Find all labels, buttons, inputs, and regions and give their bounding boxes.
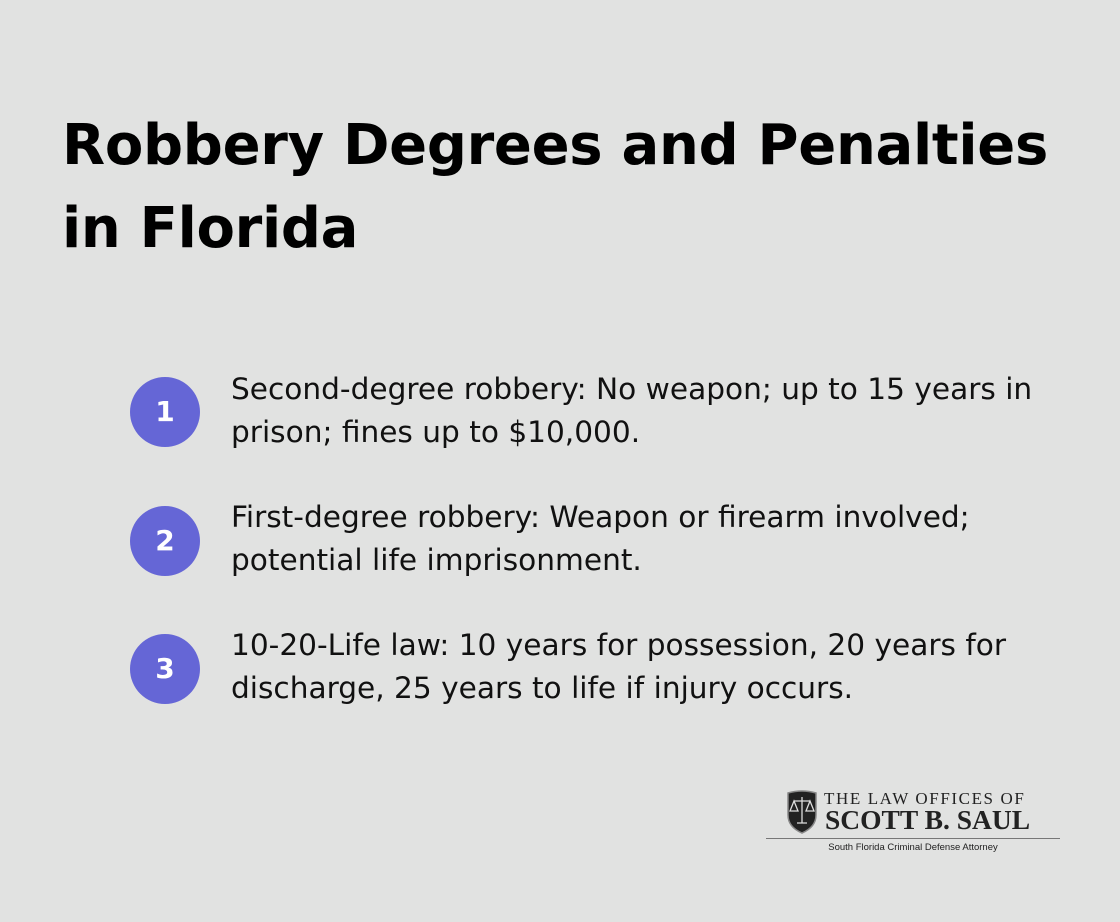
circle 3 xyxy=(130,634,200,704)
circle 2: 2 xyxy=(155,524,175,557)
icon: shield scales xyxy=(787,790,817,834)
logo text: THE LAW OFFICES OF xyxy=(824,789,1025,808)
logo: SCOTT B. SAUL xyxy=(825,804,1030,835)
text 1: Second-degree robbery: No weapon; up to 15 years in xyxy=(231,372,1032,406)
title: in Florida xyxy=(62,196,358,261)
text 1: prison; fines up to $10,000. xyxy=(231,415,640,449)
item 1 xyxy=(130,372,1032,449)
text 2: First-degree robbery: Weapon or firearm involved; xyxy=(231,500,970,534)
circle 1: 1 xyxy=(155,395,175,428)
text 3: 10-20-Life law: 10 years for possession, 20 years for xyxy=(231,628,1006,662)
item 3 xyxy=(130,628,1006,705)
text 2 xyxy=(231,500,970,577)
title xyxy=(62,113,1048,261)
logo xyxy=(766,789,1060,853)
text 3: discharge, 25 years to life if injury occurs. xyxy=(231,671,853,705)
logo: South Florida Criminal Defense Attorney xyxy=(828,842,998,853)
circle 3: 3 xyxy=(155,652,175,685)
circle 1 xyxy=(130,377,200,447)
item 2 xyxy=(130,500,970,577)
text 2: potential life imprisonment. xyxy=(231,543,642,577)
text 1 xyxy=(231,372,1032,449)
circle 2 xyxy=(130,506,200,576)
title: Robbery Degrees and Penalties xyxy=(62,113,1048,178)
text 3 xyxy=(231,628,1006,705)
